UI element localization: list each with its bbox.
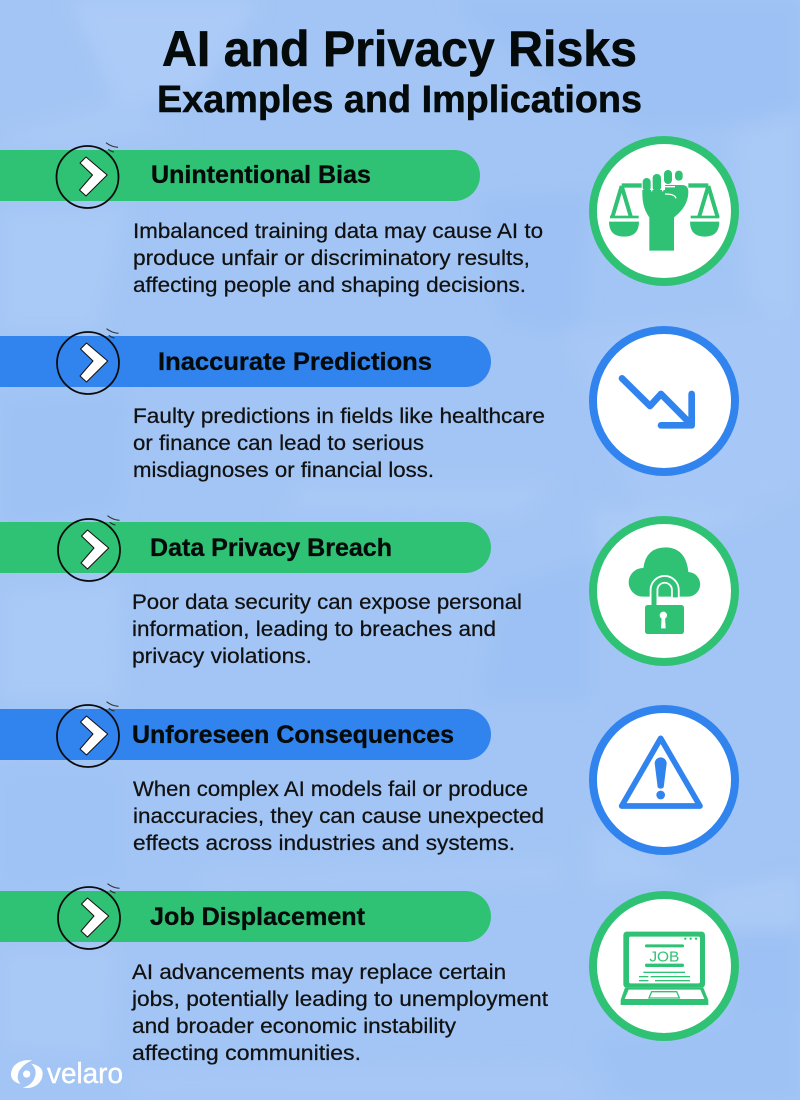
text block: data privacy breach: [132, 591, 522, 668]
title: AI and Privacy Risks: [162, 21, 637, 77]
heading bar: inaccurate predictions: Inaccurate Predictions: [158, 348, 432, 376]
text block: inaccurate predictions: [133, 405, 545, 482]
text block: unforeseen consequences: [133, 778, 544, 855]
panel: unforeseen consequences: [0, 702, 735, 855]
heading bar: unintentional bias: Unintentional Bias: [151, 161, 371, 189]
text block: data privacy breach: privacy violations.: [132, 645, 312, 668]
title: Examples and Implications: [157, 79, 642, 121]
text block: unforeseen consequences: inaccuracies, they can cause unexpected: [133, 805, 544, 828]
text block: inaccurate predictions: misdiagnoses or financial loss.: [133, 459, 434, 482]
text block: job displacement: jobs, potentially leading to unemployment: [131, 988, 548, 1011]
text block: unintentional bias: produce unfair or discriminatory results,: [133, 247, 530, 270]
panel: job displacement: [0, 884, 735, 1065]
logo: velaro: [11, 1058, 123, 1090]
icon: laptop with job listing: [593, 895, 735, 1037]
text block: job displacement: AI advancements may replace certain: [132, 961, 506, 984]
heading bar: data privacy breach: [0, 516, 491, 581]
text block: unintentional bias: [133, 220, 543, 297]
heading bar: inaccurate predictions: [0, 329, 491, 394]
icon: cloud and padlock: [593, 520, 735, 662]
title: [157, 21, 642, 121]
icon: downward trend arrow: [593, 330, 735, 472]
text block: data privacy breach: Poor data security can expose personal: [132, 591, 522, 614]
text block: unintentional bias: affecting people and shaping decisions.: [133, 274, 526, 297]
heading bar: data privacy breach: Data Privacy Breach: [150, 534, 392, 562]
heading bar: unforeseen consequences: [0, 702, 491, 767]
text block: unforeseen consequences: When complex AI models fail or produce: [133, 778, 528, 801]
icon: fist and scales: [593, 140, 735, 282]
icon: laptop with job listing: JOB: [649, 949, 679, 965]
heading bar: unforeseen consequences: Unforeseen Consequences: [132, 721, 454, 749]
panel: inaccurate predictions: [0, 329, 735, 482]
panel: data privacy breach: [0, 516, 735, 668]
logo: velaro: velaro: [47, 1058, 123, 1090]
text block: job displacement: and broader economic instability: [132, 1015, 457, 1038]
text block: inaccurate predictions: Faulty predictions in fields like healthcare: [133, 405, 545, 428]
text block: job displacement: affecting communities.: [132, 1042, 361, 1065]
text block: inaccurate predictions: or finance can lead to serious: [133, 432, 424, 455]
panel: unintentional bias: [0, 140, 735, 297]
text block: data privacy breach: information, leading to breaches and: [132, 618, 496, 641]
text block: unintentional bias: Imbalanced training data may cause AI to: [133, 220, 543, 243]
heading bar: job displacement: Job Displacement: [150, 903, 366, 931]
icon: warning triangle: [593, 709, 735, 851]
text block: unforeseen consequences: effects across industries and systems.: [133, 832, 515, 855]
text block: job displacement: [131, 961, 548, 1065]
heading bar: unintentional bias: [0, 143, 480, 208]
heading bar: job displacement: [0, 884, 491, 949]
